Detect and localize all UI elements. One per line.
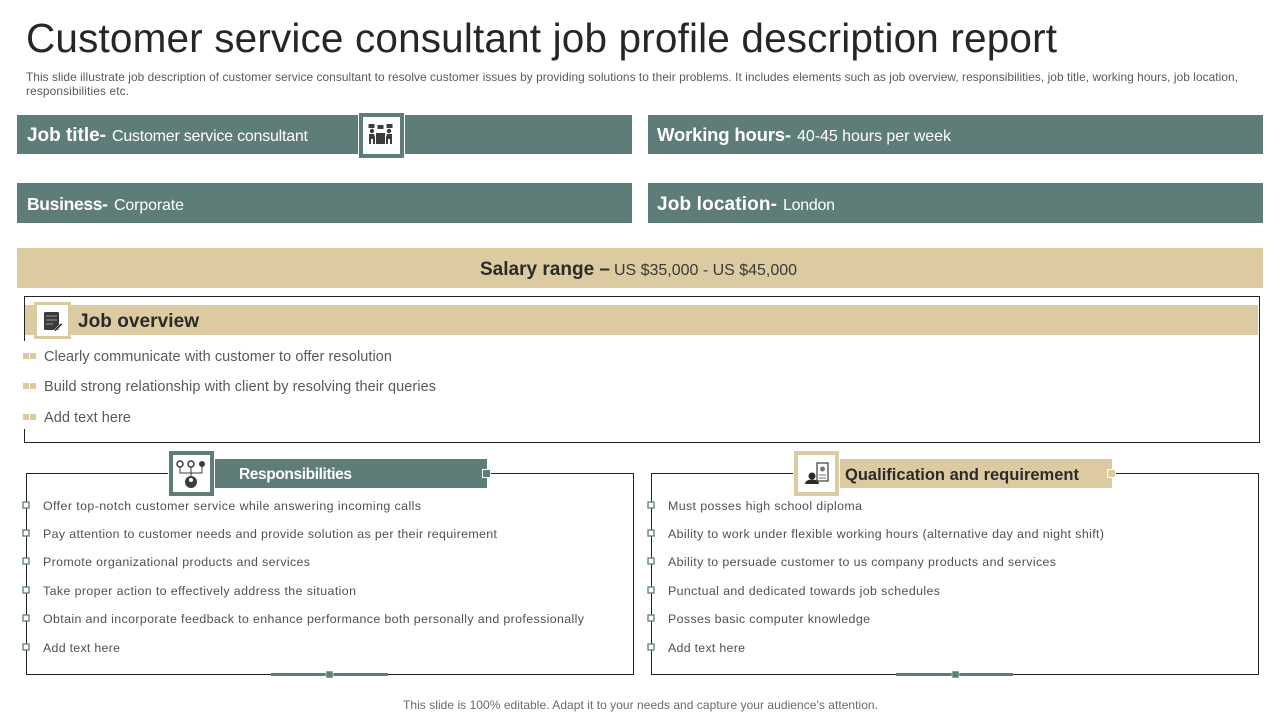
panel: business: Business- <box>27 194 108 214</box>
panel: business: Corporate <box>114 197 184 214</box>
panel: job title <box>17 112 632 159</box>
qualification heading bar <box>793 459 1116 488</box>
qualification list: Must posses high school diploma <box>668 499 862 513</box>
description text: This slide illustrate job description of customer service consultant to resolve customer issues by providing solutions to their problems. It includes elements such as job overview, responsibilities, job title, working hours, job location, <box>26 70 1238 84</box>
panel: qualification and requirement <box>648 453 1258 678</box>
panel: job title: Customer service consultant <box>112 128 309 145</box>
overview bullet list: Add text here <box>44 410 131 426</box>
panel: job title: Job title- <box>27 125 106 146</box>
responsibilities list: Promote organizational products and services <box>43 555 310 569</box>
panel: job overview <box>20 296 1260 442</box>
job overview heading bar <box>25 305 1258 335</box>
panel: working hours: Working hours- <box>657 124 791 145</box>
panel: job location: Job location- <box>657 194 777 215</box>
footer note: This slide is 100% editable. Adapt it to your needs and capture your audience's attention. <box>403 698 878 712</box>
responsibilities list: Take proper action to effectively address the situation <box>43 584 356 598</box>
qualification list: Posses basic computer knowledge <box>668 612 870 626</box>
panel: salary range <box>17 248 1263 288</box>
description text <box>26 70 1238 98</box>
icon: graduate and certificate <box>796 453 837 494</box>
responsibilities list: Offer top-notch customer service while answering incoming calls <box>43 499 421 513</box>
responsibilities heading bar: Responsibilities <box>239 466 352 483</box>
panel: business <box>17 183 632 223</box>
qualification list: Ability to persuade customer to us company products and services <box>668 555 1056 569</box>
panel: salary range: US $35,000 - US $45,000 <box>614 262 797 279</box>
qualification list: Punctual and dedicated towards job schedules <box>668 584 940 598</box>
panel: job location <box>648 183 1263 223</box>
qualification list: Ability to work under flexible working hours (alternative day and night shift) <box>668 527 1104 541</box>
qualification list: Add text here <box>668 641 745 655</box>
overview bullet list <box>23 349 436 426</box>
panel: working hours: 40-45 hours per week <box>797 128 952 145</box>
panel: responsibilities <box>23 453 634 678</box>
responsibilities list <box>23 499 585 655</box>
qualification list <box>648 499 1104 655</box>
responsibilities list: Pay attention to customer needs and provide solution as per their requirement <box>43 527 498 541</box>
responsibilities list: Add text here <box>43 641 120 655</box>
icon: org network person <box>171 453 212 494</box>
responsibilities heading bar <box>168 459 490 488</box>
title: Customer service consultant job profile description report <box>26 15 1057 61</box>
panel: working hours <box>648 115 1263 154</box>
panel: job location: London <box>783 197 835 214</box>
responsibilities list: Obtain and incorporate feedback to enhance performance both personally and professionally <box>43 612 585 626</box>
overview bullet list: Clearly communicate with customer to offer resolution <box>44 349 392 365</box>
panel: salary range: Salary range – <box>480 259 610 280</box>
icon: meeting table <box>358 112 405 159</box>
icon: notepad and pen <box>36 304 70 338</box>
description text: responsibilities etc. <box>26 84 129 98</box>
qualification heading bar: Qualification and requirement <box>845 466 1080 484</box>
job overview heading bar: Job overview <box>78 311 199 332</box>
overview bullet list: Build strong relationship with client by resolving their queries <box>44 379 436 395</box>
